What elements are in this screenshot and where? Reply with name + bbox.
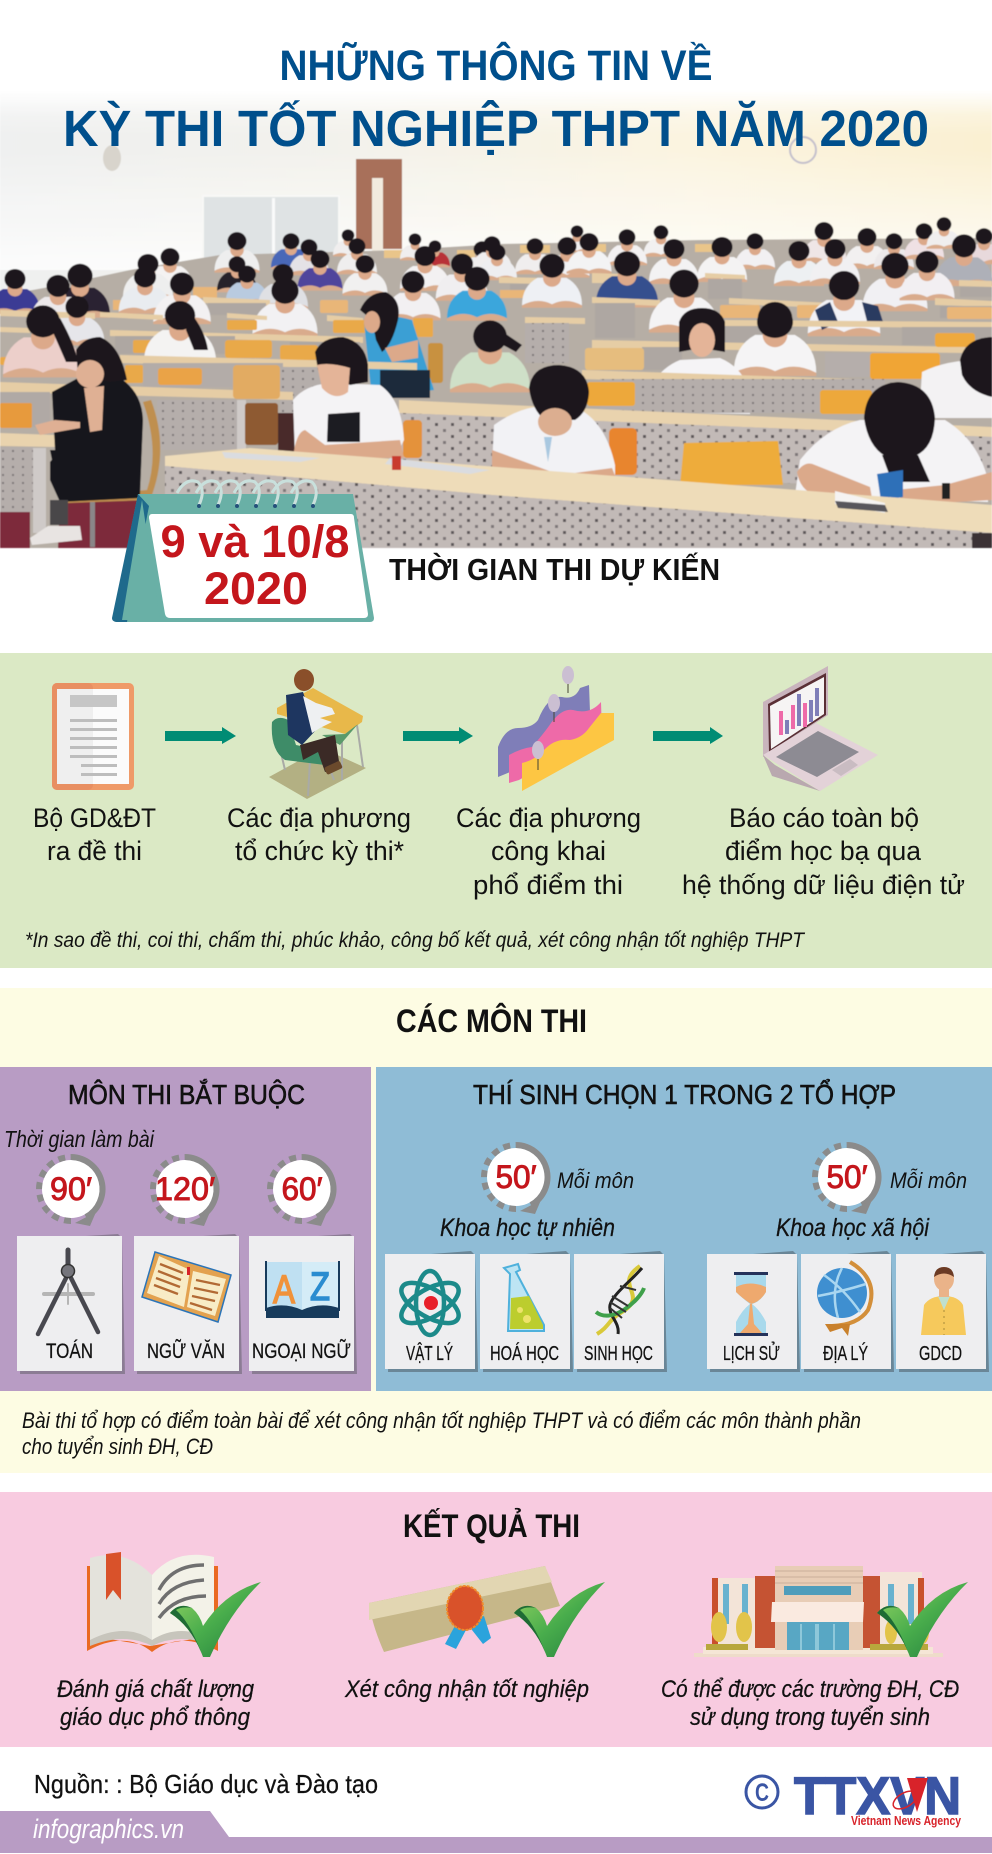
- clock 120: [153, 1157, 217, 1226]
- clock 50 social sciences: [815, 1145, 879, 1214]
- label: ĐỊA LÝ: [823, 1342, 868, 1365]
- arrow 2: [403, 727, 473, 744]
- date text: 9 và 10/8: [160, 516, 350, 567]
- source line: Nguồn: : Bộ Giáo dục và Đào tạo: [34, 1769, 378, 1799]
- icon: laptop: [763, 666, 878, 791]
- note on combined exam: [22, 1408, 861, 1459]
- card: geography: [801, 1251, 894, 1372]
- note on combined exam: cho tuyển sinh ĐH, CĐ: [22, 1434, 213, 1459]
- step 1 label: ra đề thi: [47, 836, 142, 866]
- label: SINH HỌC: [584, 1343, 653, 1365]
- icon: student at desk: [269, 669, 366, 799]
- heading: subjects: CÁC MÔN THI: [396, 1003, 587, 1039]
- footnote: *In sao đề thi, coi thi, chấm thi, phúc khảo, công bố kết quả, xét công nhận tốt nghiệp THPT: [25, 929, 806, 952]
- copyright mark: [746, 1776, 778, 1808]
- icon: diploma with check: [369, 1566, 605, 1657]
- caption: quality assessment: [57, 1676, 255, 1731]
- card: physics: [385, 1251, 478, 1372]
- step 2 label: [227, 803, 411, 866]
- step 4 label: Báo cáo toàn bộ: [729, 803, 919, 833]
- site name: infographics.vn: [33, 1814, 184, 1844]
- arrow 3: [653, 727, 723, 744]
- duration caption: Thời gian làm bài: [4, 1126, 155, 1152]
- panel: elective combinations: [376, 1067, 992, 1391]
- clock 50 social sciences: 50′: [826, 1159, 868, 1195]
- icon: score chart waves: [498, 666, 614, 791]
- calendar: exam date: [112, 481, 374, 622]
- step 4 label: hệ thống dữ liệu điện tử: [682, 870, 965, 900]
- date caption: THỜI GIAN THI DỰ KIẾN: [389, 551, 720, 587]
- panel: exam process: [0, 653, 992, 968]
- card: foreign language: A: [273, 1268, 295, 1312]
- clock 50 natural sciences: [484, 1145, 548, 1214]
- caption: quality assessment: Đánh giá chất lượng: [57, 1676, 255, 1703]
- label: TOÁN: [46, 1340, 93, 1363]
- card: history: [707, 1251, 800, 1372]
- card: foreign language: Z: [310, 1265, 330, 1309]
- card: civics: [896, 1251, 989, 1372]
- label: VẬT LÝ: [406, 1342, 453, 1365]
- card: literature: [134, 1234, 242, 1374]
- caption: university admission: sử dụng trong tuyển sinh: [690, 1704, 930, 1731]
- card: chemistry: [480, 1251, 573, 1372]
- step 4 label: điểm học bạ qua: [725, 836, 922, 866]
- clock 90: 90′: [50, 1171, 92, 1207]
- label: HOÁ HỌC: [490, 1342, 559, 1365]
- heading: results: KẾT QUẢ THI: [403, 1508, 580, 1544]
- heading: social sciences: Khoa học xã hội: [776, 1214, 930, 1242]
- panel: exam subjects: [0, 988, 992, 1473]
- step 3 label: [456, 803, 641, 900]
- clock 120: 120′: [155, 1171, 215, 1207]
- caption: university admission: [661, 1676, 959, 1731]
- clock 60: 60′: [282, 1171, 322, 1207]
- card: math: [17, 1234, 125, 1374]
- clock 60: [270, 1157, 334, 1226]
- photo: students in exam hall: [0, 90, 992, 548]
- label: NGỮ VĂN: [147, 1339, 225, 1363]
- heading: natural sciences: Khoa học tự nhiên: [440, 1214, 615, 1242]
- panel: compulsory subjects: [0, 1067, 371, 1391]
- clock 50 natural sciences: 50′: [496, 1159, 536, 1195]
- title line 2: KỲ THI TỐT NGHIỆP THPT NĂM 2020: [63, 99, 929, 157]
- title: [63, 41, 929, 157]
- logo: TTXVN: Vietnam News Agency: [851, 1813, 962, 1828]
- step 3 label: công khai: [491, 836, 606, 866]
- icon: university with check: [694, 1566, 968, 1657]
- step 3 label: phổ điểm thi: [473, 870, 623, 900]
- step 1 label: Bộ GD&ĐT: [33, 803, 156, 833]
- label: NGOẠI NGỮ: [252, 1339, 351, 1363]
- heading: elective: THÍ SINH CHỌN 1 TRONG 2 TỔ HỢP: [473, 1079, 896, 1110]
- note on combined exam: Bài thi tổ hợp có điểm toàn bài để xét công nhận tốt nghiệp THPT và có điểm các môn thành phần: [22, 1408, 861, 1433]
- arrow 1: [165, 727, 236, 744]
- logo: TTXVN: TTXVN: [794, 1767, 961, 1826]
- card: foreign language: [249, 1234, 357, 1374]
- panel: exam results: [0, 1492, 992, 1747]
- step 1 label: [33, 803, 156, 866]
- per subject note 1: Mỗi môn: [557, 1168, 634, 1193]
- per subject note 2: Mỗi môn: [890, 1168, 967, 1193]
- caption: graduation recognition: Xét công nhận tốt nghiệp: [344, 1676, 589, 1703]
- year text: 2020: [204, 563, 308, 614]
- copyright mark: C: [755, 1779, 769, 1807]
- step 3 label: Các địa phương: [456, 803, 641, 833]
- step 4 label: [682, 803, 965, 900]
- footer band: [0, 1811, 992, 1853]
- step 2 label: tổ chức kỳ thi*: [235, 836, 404, 866]
- heading: compulsory: MÔN THI BẮT BUỘC: [68, 1079, 305, 1110]
- label: LỊCH SỬ: [723, 1341, 780, 1365]
- caption: quality assessment: giáo dục phổ thông: [60, 1704, 251, 1731]
- icon: exam paper: [52, 683, 134, 790]
- step 2 label: Các địa phương: [227, 803, 411, 833]
- clock 90: [39, 1157, 103, 1226]
- icon: book with check: [87, 1552, 261, 1657]
- title line 1: NHỮNG THÔNG TIN VỀ: [280, 41, 712, 90]
- card: biology: [574, 1251, 667, 1372]
- label: GDCD: [919, 1343, 962, 1365]
